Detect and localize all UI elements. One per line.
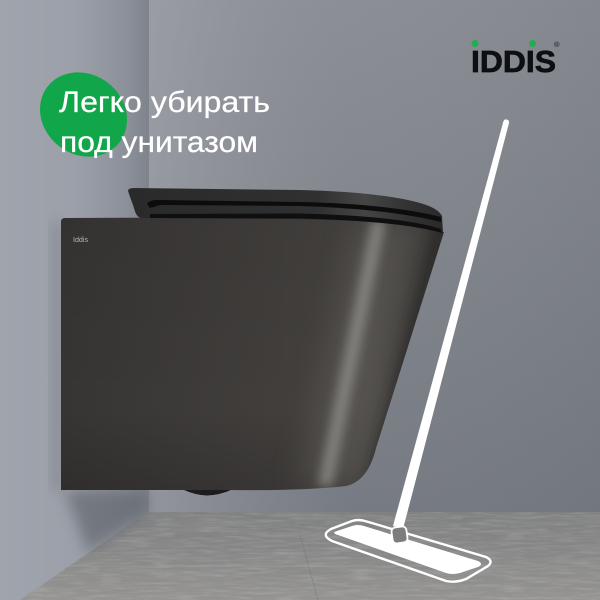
mop pad — [334, 525, 481, 574]
left wall — [0, 0, 149, 600]
toilet — [61, 188, 450, 496]
logo: ® — [554, 40, 560, 49]
mop handle — [393, 119, 509, 529]
small brand mark: Iddis — [73, 235, 88, 244]
drain bump — [184, 490, 231, 496]
heading — [59, 86, 270, 159]
heading: Легко убирать — [59, 86, 270, 119]
toilet seat and lid — [128, 188, 443, 233]
logo: IDDIS — [471, 44, 556, 79]
green circle — [23, 55, 144, 174]
floor — [0, 512, 600, 600]
mop head outline — [326, 520, 491, 582]
mop — [326, 119, 509, 582]
heading: под унитазом — [60, 126, 258, 159]
toilet shadow on walls — [52, 222, 148, 552]
mop connector — [391, 526, 408, 544]
toilet bowl — [61, 217, 450, 492]
back wall — [148, 0, 600, 520]
